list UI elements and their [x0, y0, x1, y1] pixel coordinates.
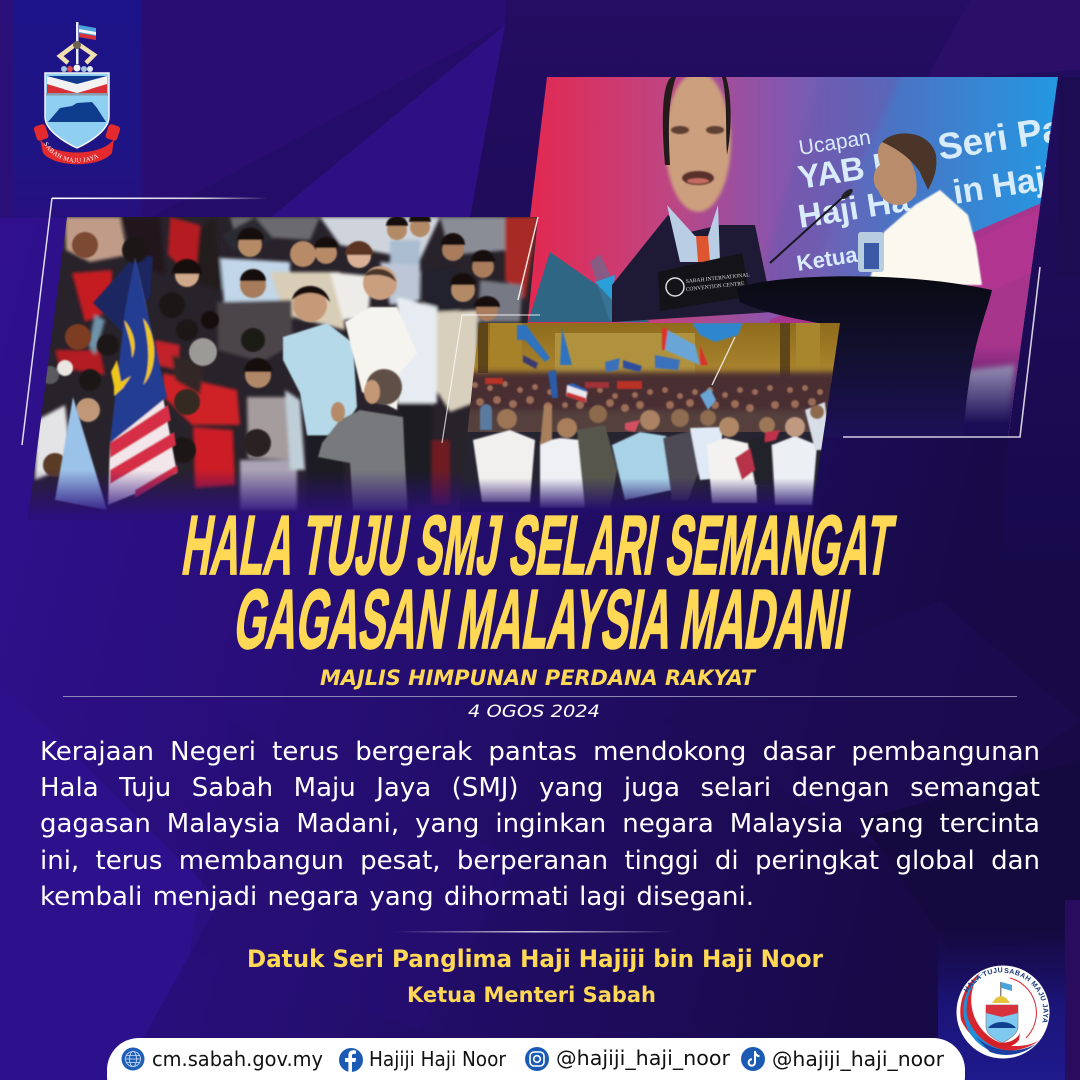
screen wording: Ketua M — [795, 238, 883, 276]
screen wording: Seri Pa — [935, 108, 1066, 168]
crossed arms — [60, 44, 94, 63]
flag: dark blue — [93, 253, 153, 333]
bottom fade — [963, 350, 1020, 437]
social media bar: cm.sabah.gov.my — [152, 1047, 323, 1071]
crowd clothing — [35, 217, 538, 510]
crowd mass — [458, 372, 840, 427]
icon: tiktok — [741, 1047, 765, 1071]
pale blue flag — [55, 397, 107, 510]
people heads — [41, 212, 500, 477]
venue sign: CONVENTION CENTRE — [686, 281, 745, 293]
crowd faces — [472, 381, 823, 412]
venue sign — [658, 253, 751, 311]
screen wording: YAB D — [795, 144, 900, 196]
fade at bottom — [28, 472, 509, 520]
social media bar — [107, 1038, 965, 1080]
front row people — [473, 402, 830, 510]
photo: prime minister in crowd — [20, 212, 540, 522]
social media bar: @hajiji_haji_noor — [772, 1047, 945, 1071]
hall wall — [458, 323, 840, 383]
badge: Hala Tuju Sabah Maju Jaya: HALA TUJU — [964, 967, 1002, 992]
title — [177, 497, 900, 666]
subtitle: MAJLIS HIMPUNAN PERDANA RAKYAT — [320, 666, 757, 690]
photo: rally with flags — [458, 323, 840, 517]
Anwar in light blue shirt — [283, 286, 357, 510]
body paragraph: kembali menjadi negara yang dihormati lagi disegani. — [40, 882, 754, 912]
wreath beads — [61, 64, 93, 72]
social media bar: Hajiji Haji Noor — [369, 1047, 507, 1071]
speaker role: Ketua Menteri Sabah — [407, 983, 656, 1007]
white frame: rally photo — [442, 315, 540, 443]
speaker — [858, 133, 982, 285]
screen wording: Haji Ha — [795, 181, 912, 235]
photo: speaker at podium — [515, 72, 1066, 440]
pale wall panel — [960, 365, 1015, 437]
crest: Sabah state arms: SABAH MAJU JAYA — [44, 142, 99, 162]
body paragraph: gagasan Malaysia Madani, yang inginkan negara Malaysia yang tercinta — [40, 809, 1040, 839]
screen wording: Ucapan — [797, 126, 872, 160]
blue geometric panel — [528, 252, 650, 322]
white frame: speaker photo — [843, 267, 1040, 437]
body paragraph: Hala Tuju Sabah Maju Jaya (SMJ) yang juga selari dengan semangat — [40, 773, 1040, 803]
social media bar: @hajiji_haji_noor — [556, 1046, 731, 1070]
badge: Hala Tuju Sabah Maju Jaya: SABAH MAJU JAYA — [1004, 968, 1048, 1022]
date: 4 OGOS 2024 — [468, 702, 600, 722]
grey-shirted aide — [318, 369, 407, 510]
motto scroll — [40, 139, 114, 164]
icon: facebook — [339, 1048, 363, 1072]
shield — [45, 73, 109, 148]
screen wording — [797, 120, 1052, 271]
flag on pole — [76, 22, 78, 64]
screen backdrop — [515, 77, 1060, 439]
icon: globe — [122, 1048, 144, 1070]
screen portrait — [612, 72, 773, 322]
body paragraph: Kerajaan Negeri terus bergerak pantas mendokong dasar pembangunan — [40, 737, 1040, 767]
microphone — [770, 197, 843, 263]
body paragraph: ini, terus membangun pesat, berperanan tinggi di peringkat global dan — [40, 846, 1040, 876]
flags — [485, 323, 743, 410]
badge: Hala Tuju Sabah Maju Jaya — [956, 966, 1050, 1058]
Malaysian flag — [108, 258, 178, 505]
speaker name: Datuk Seri Panglima Haji Hajiji bin Haji Noor — [247, 945, 823, 973]
crest: Sabah state arms — [34, 22, 120, 164]
Hajiji in white shirt — [345, 266, 417, 410]
fade at bottom — [459, 479, 816, 512]
screen wording: in Haji — [950, 158, 1057, 212]
white frame: crowd photo — [22, 198, 538, 445]
venue sign: SABAH INTERNATIONAL — [686, 272, 751, 285]
icon: instagram — [525, 1047, 549, 1071]
podium — [739, 276, 992, 422]
